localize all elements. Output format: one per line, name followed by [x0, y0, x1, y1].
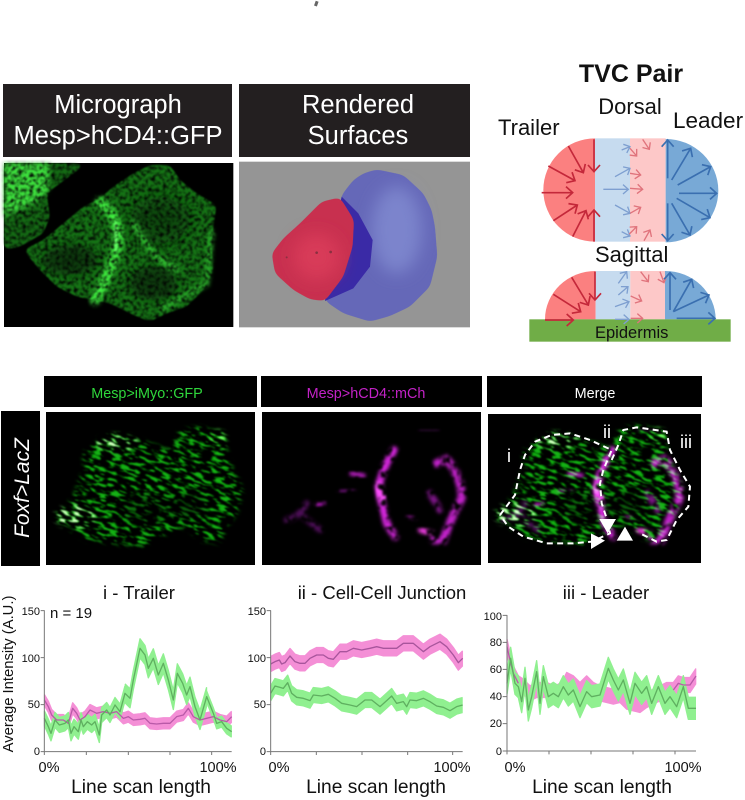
chart: ii - Cell-Cell Junction: ii - Cell-Cell Junction: [298, 582, 466, 603]
chart: i - Trailer: i - Trailer: [103, 582, 175, 603]
chart: ii - Cell-Cell Junction: 100%: [433, 760, 471, 776]
title: TVC Pair: TVC Pair: [579, 60, 683, 88]
panel: micrograph header: Mesp>hCD4::GFP: [13, 122, 223, 150]
chart: i - Trailer: 100%: [199, 760, 237, 776]
chart: iii - Leader: 60: [490, 664, 502, 676]
label: Epidermis: Epidermis: [595, 324, 668, 342]
chart: iii - Leader: Line scan length: [532, 777, 672, 798]
chart: iii - Leader: 20: [490, 718, 502, 730]
label: Trailer: Trailer: [498, 115, 560, 140]
label: Dorsal: Dorsal: [598, 94, 662, 119]
header: Merge: Merge: [575, 386, 615, 402]
chart: i - Trailer: 0: [34, 746, 40, 758]
epidermis bar: [529, 319, 731, 342]
chart: iii - Leader: 0%: [505, 760, 526, 776]
chart: ii - Cell-Cell Junction: 150: [248, 606, 266, 618]
chart: iii - Leader: 0: [496, 746, 502, 758]
micrograph: hCD4 mCherry channel: [262, 412, 481, 565]
panel: micrograph header: [3, 84, 232, 157]
junction surface: [325, 197, 373, 301]
diagram: dorsal view of TVC pair: [542, 138, 718, 242]
header: Merge: [487, 376, 702, 407]
leader cell surface: [325, 169, 437, 322]
rendered surfaces: blue and red cells: [239, 162, 470, 327]
label: Leader: Leader: [673, 108, 744, 133]
panel: micrograph header: Micrograph: [54, 91, 182, 119]
label: Sagittal: Sagittal: [595, 242, 668, 267]
chart: i - Trailer: n = 19: [50, 605, 92, 622]
chart: i - Trailer: 50: [28, 699, 40, 711]
label: i: i: [507, 446, 511, 466]
chart: iii - Leader: 80: [490, 637, 502, 649]
side label: Foxf>LacZ: [1, 411, 40, 566]
chart: ii - Cell-Cell Junction: Line scan length: [306, 777, 446, 798]
chart: iii - Leader: 100%: [664, 760, 702, 776]
chart: ii - Cell-Cell Junction: 0: [260, 746, 266, 758]
header: Mesp>hCD4::mCh: [261, 376, 482, 407]
dashed outline: leader cell: [612, 427, 690, 542]
y axis label: Average Intensity (A.U.): [1, 596, 17, 752]
side label: Foxf>LacZ: Foxf>LacZ: [11, 437, 34, 538]
micrograph: merge with outlines: [456, 364, 722, 605]
dashed outline: trailer cell: [500, 433, 612, 543]
chart: iii - Leader: iii - Leader: [563, 582, 649, 603]
chart: ii - Cell-Cell Junction: 100: [248, 653, 266, 665]
panel: rendered surfaces header: Surfaces: [308, 122, 408, 150]
chart: i - Trailer: [22, 582, 237, 798]
chart: iii - Leader: 40: [490, 691, 502, 703]
micrograph: iMyo GFP channel: [16, 366, 282, 607]
micrograph: green membrane image: [4, 163, 233, 327]
arrowheads: [591, 519, 633, 549]
chart: ii - Cell-Cell Junction: [248, 582, 471, 798]
panel: rendered surfaces header: Rendered: [302, 91, 414, 119]
chart: i - Trailer: Line scan length: [71, 777, 211, 798]
header: Mesp>iMyo::GFP: Mesp>iMyo::GFP: [91, 386, 203, 402]
label: iii: iii: [680, 432, 692, 452]
chart: ii - Cell-Cell Junction: 50: [254, 699, 266, 711]
chart: ii - Cell-Cell Junction: 0%: [269, 760, 290, 776]
trailer cell surface: [272, 197, 354, 301]
label: ii: ii: [603, 422, 611, 442]
chart: i - Trailer: 150: [22, 606, 40, 618]
panel: rendered surfaces header: [239, 84, 470, 157]
chart: i - Trailer: 100: [22, 653, 40, 665]
speck mark: [314, 1, 319, 7]
chart: i - Trailer: 0%: [39, 760, 60, 776]
chart: iii - Leader: [484, 582, 702, 798]
header: Mesp>iMyo::GFP: [44, 376, 257, 407]
chart: iii - Leader: 100: [484, 611, 502, 623]
diagram: sagittal view of TVC pair on epidermis: [529, 271, 731, 342]
header: Mesp>hCD4::mCh: Mesp>hCD4::mCh: [307, 386, 425, 402]
